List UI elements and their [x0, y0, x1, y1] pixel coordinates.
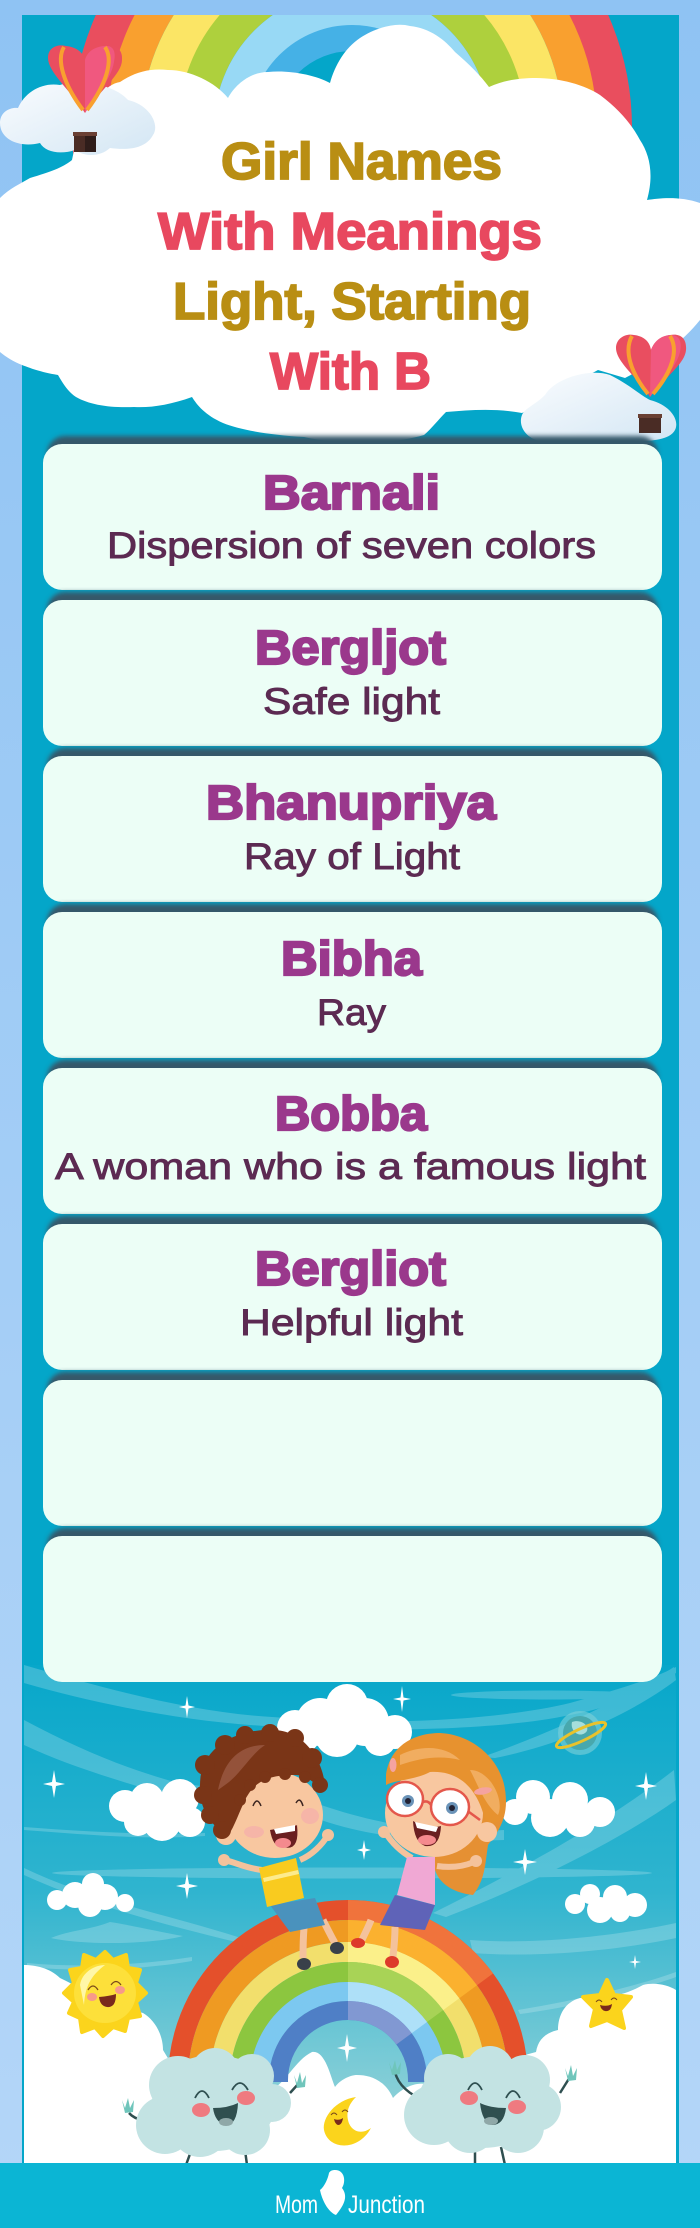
rainbow arch — [170, 1900, 526, 2082]
card 5: Bobba: A woman who is a famous light — [55, 1146, 647, 1187]
clouds in the sky — [47, 1684, 647, 1923]
title: With B — [270, 343, 431, 401]
logo text — [275, 2191, 425, 2219]
card 2: Bergljot: Bergljot — [255, 622, 446, 675]
card 5: Bobba: Bobba — [275, 1088, 427, 1141]
moon — [324, 2097, 371, 2146]
card 3: Bhanupriya: Ray of Light — [244, 836, 461, 877]
footer band — [0, 2163, 700, 2228]
card 5: Bobba — [43, 1060, 662, 1214]
white ground clouds — [24, 1965, 676, 2165]
card 2: Bergljot — [43, 592, 662, 746]
card 4: Bibha — [43, 904, 662, 1058]
card 6: Bergliot: Helpful light — [240, 1302, 464, 1343]
title — [158, 133, 542, 401]
balloon left — [48, 45, 122, 152]
card 3: Bhanupriya: Bhanupriya — [206, 777, 496, 830]
small cloud left — [0, 82, 155, 155]
star — [583, 1980, 631, 2028]
card 2: Bergljot: Safe light — [263, 681, 441, 722]
boy — [194, 1724, 344, 1970]
logo text: Junction — [348, 2191, 425, 2219]
header white cloud — [0, 25, 700, 443]
planet — [554, 1711, 608, 1755]
cloud character left — [122, 2048, 306, 2165]
card 8: empty — [43, 1528, 662, 1682]
small cloud right — [521, 373, 676, 441]
card 4: Bibha: Ray — [317, 992, 387, 1033]
card 1: Barnali: Barnali — [263, 467, 440, 520]
header rainbow — [72, 15, 632, 155]
sun — [64, 1952, 146, 2036]
title: Light, Starting — [173, 273, 531, 331]
cloud character right — [389, 2046, 577, 2165]
card 1: Barnali — [43, 436, 662, 590]
title: With Meanings — [158, 203, 542, 261]
logo text: Mom — [275, 2191, 318, 2219]
card 6: Bergliot: Bergliot — [255, 1243, 446, 1296]
logo icon — [320, 2170, 345, 2215]
title: Girl Names — [221, 133, 502, 191]
card 4: Bibha: Bibha — [281, 933, 422, 986]
girl — [351, 1733, 506, 1968]
balloon right — [616, 335, 686, 433]
sparkles — [43, 1686, 657, 2062]
card 7: empty — [43, 1372, 662, 1526]
bottom illustration sky — [24, 1665, 676, 2165]
card 1: Barnali: Dispersion of seven colors — [107, 525, 596, 566]
card 3: Bhanupriya — [43, 748, 662, 902]
card 6: Bergliot — [43, 1216, 662, 1370]
